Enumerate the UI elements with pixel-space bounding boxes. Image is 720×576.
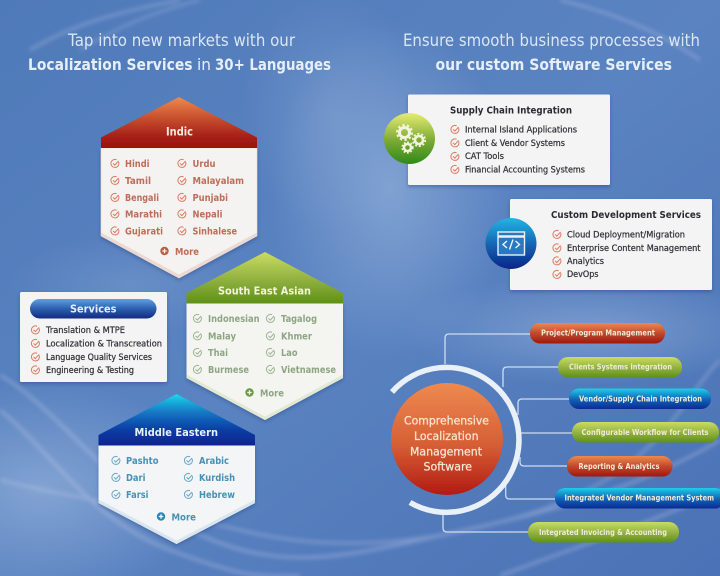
heading: localization services: in — [197, 55, 211, 74]
heading: localization services: Localization Services — [28, 55, 192, 74]
pill: Vendor/Supply Chain Integration: Vendor/Supply Chain Integration — [579, 394, 702, 404]
panel: Middle Eastern: Kurdish — [199, 473, 235, 484]
central circle: Software — [424, 460, 472, 474]
panel: South East Asian: Tagalog — [281, 314, 317, 325]
pill: Clients Systems Integration: Clients Systems Integration — [569, 362, 672, 372]
panel: Middle Eastern: Dari — [126, 473, 146, 484]
pill: Project/Program Management: Project/Program Management — [541, 328, 655, 338]
heading: localization services: Tap into new markets with our — [67, 31, 295, 51]
panel: Middle Eastern: More — [172, 512, 196, 524]
panel: Indic: Marathi — [125, 210, 162, 220]
heading: software services: our custom Software Services — [436, 55, 672, 74]
panel: Middle Eastern: Farsi — [126, 490, 148, 501]
panel: Middle Eastern: Hebrew — [199, 490, 235, 501]
panel: Custom Development Services: DevOps — [567, 269, 598, 279]
panel: Custom Development Services — [510, 199, 712, 290]
central circle: Management — [410, 444, 482, 458]
heading: localization services: 30+ Languages — [215, 55, 331, 74]
panel: Supply Chain Integration: Internal Island Applications — [465, 124, 577, 134]
pill: Clients Systems Integration — [558, 357, 682, 378]
panel: South East Asian: More — [260, 388, 284, 400]
panel: Middle Eastern: Middle Eastern — [134, 426, 218, 439]
panel: Middle Eastern — [98, 394, 255, 544]
central circle — [391, 383, 503, 495]
central circle: Comprehensive — [404, 414, 489, 428]
panel: Supply Chain Integration: Financial Accounting Systems — [465, 164, 585, 174]
icon: gears — [384, 113, 435, 164]
services pill — [30, 299, 156, 318]
panel: South East Asian: Lao — [281, 348, 298, 359]
panel: Indic: Bengali — [125, 193, 159, 204]
pill: Integrated Vendor Management System — [555, 488, 720, 508]
heading: software services — [403, 31, 700, 74]
panel: Supply Chain Integration: CAT Tools — [465, 151, 504, 161]
pill: Reporting & Analytics — [567, 456, 672, 476]
panel: Indic: Nepali — [192, 210, 222, 220]
panel: Indic — [101, 97, 257, 278]
panel: Services: Translation & MTPE — [45, 325, 125, 335]
pill: Integrated Invoicing & Accounting — [528, 522, 679, 542]
central circle: Localization — [414, 429, 478, 443]
panel: South East Asian: Indonesian — [208, 314, 260, 325]
panel: Services: Engineering & Testing — [46, 365, 134, 375]
panel: Indic: More — [175, 247, 199, 258]
panel: Indic: Hindi — [125, 159, 150, 170]
panel: Middle Eastern: Arabic — [199, 456, 229, 467]
services pill: Services — [70, 304, 116, 316]
pill: Project/Program Management — [530, 323, 665, 344]
panel: Indic: Malayalam — [192, 176, 244, 187]
panel: Indic: Indic — [166, 124, 193, 138]
panel: Services: Language Quality Services — [46, 352, 152, 362]
panel: Custom Development Services: Custom Development Services — [551, 210, 701, 221]
pill: Configurable Workflow for Clients — [572, 422, 719, 442]
icon: code window — [486, 218, 536, 269]
panel: Middle Eastern: Pashto — [126, 456, 159, 467]
panel: Indic: Sinhalese — [192, 226, 237, 238]
panel: Indic: Gujarati — [125, 226, 163, 238]
panel: Custom Development Services: Enterprise Content Management — [567, 243, 701, 253]
pill: Integrated Invoicing & Accounting: Integrated Invoicing & Accounting — [539, 528, 667, 537]
panel: South East Asian: Khmer — [281, 332, 312, 342]
panel: Supply Chain Integration: Client & Vendor Systems — [465, 138, 565, 148]
panel: Services — [20, 292, 167, 382]
panel: South East Asian: Thai — [208, 348, 228, 359]
panel: Supply Chain Integration — [408, 94, 610, 185]
connector lines — [443, 334, 572, 532]
panel: Supply Chain Integration: Supply Chain Integration — [450, 106, 572, 116]
panel: South East Asian: Burmese — [208, 365, 249, 376]
panel: South East Asian: Vietnamese — [281, 365, 336, 376]
panel: South East Asian: South East Asian — [218, 284, 311, 298]
panel: Indic: Tamil — [125, 176, 151, 187]
panel: Indic: Urdu — [192, 159, 216, 170]
panel: Services: Localization & Transcreation — [46, 338, 162, 348]
ring arc — [392, 367, 519, 512]
pill: Vendor/Supply Chain Integration — [569, 388, 711, 409]
panel: Indic: Punjabi — [192, 193, 228, 204]
heading: localization services — [28, 31, 331, 74]
panel: South East Asian — [186, 252, 343, 420]
panel: Custom Development Services: Cloud Deployment/Migration — [567, 230, 685, 240]
pill: Reporting & Analytics: Reporting & Analytics — [578, 462, 660, 471]
panel: South East Asian: Malay — [208, 332, 237, 342]
panel: Custom Development Services: Analytics — [567, 256, 604, 266]
